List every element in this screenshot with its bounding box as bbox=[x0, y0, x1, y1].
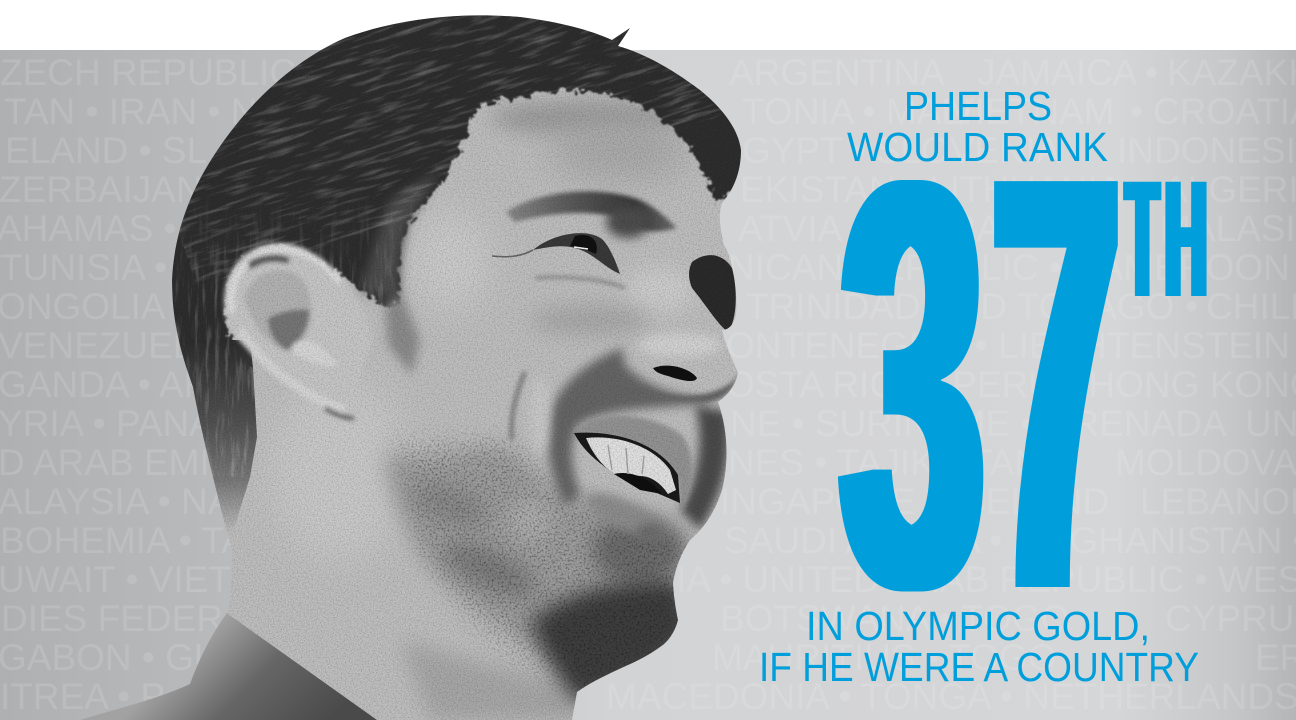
ear inner bbox=[244, 270, 312, 352]
watermark: olympic country names: MOLDOVA bbox=[1115, 442, 1296, 483]
superscript th bbox=[1126, 146, 1207, 332]
watermark: olympic country names: JAMAICA bbox=[977, 52, 1138, 93]
face tonal shading bbox=[490, 102, 690, 134]
superscript th: H bbox=[1165, 147, 1207, 332]
watermark: olympic country names: VENEZUEL bbox=[0, 325, 193, 366]
nasolabial shadow bbox=[547, 348, 715, 505]
watermark: olympic country names: EKISTAN • LITHUANIA bbox=[740, 169, 1123, 210]
watermark: olympic country names: MAURITIUS • TOGO bbox=[712, 637, 1057, 678]
nose bbox=[638, 333, 722, 357]
ear bbox=[224, 243, 372, 418]
watermark: olympic country names: ALAYSIA • NA bbox=[0, 481, 233, 522]
lower lip shadow bbox=[585, 489, 663, 540]
watermark: olympic country names: ARGENTINA bbox=[729, 52, 945, 93]
hair fade at nape bbox=[178, 340, 257, 528]
superscript th: T bbox=[1126, 146, 1158, 332]
watermark: olympic country names: ATVIA • BAHRAIN bbox=[738, 208, 1038, 249]
watermark: olympic country names: UWAIT • VIET bbox=[0, 559, 231, 600]
watermark: olympic country names: GYPT • SLOVENIA bbox=[742, 130, 1061, 171]
upper lip bbox=[575, 415, 692, 512]
heading: Phelps would rank bbox=[847, 83, 1108, 170]
watermark: olympic country names: TUNISIA • bbox=[0, 247, 167, 288]
watermark: olympic country names: INGAPORE • ICELAND bbox=[720, 481, 1109, 522]
watermark: olympic country names: ZERBAIJAN bbox=[0, 169, 203, 210]
watermark: olympic country names: GABON • GU bbox=[0, 637, 221, 678]
watermark: olympic country names: MACEDONIA • TONGA • NETHERLANDS bbox=[606, 676, 1296, 717]
heading: Phelps would rank: PHELPS bbox=[904, 83, 1052, 129]
watermark: olympic country names: TAN • IRAN • N bbox=[4, 91, 257, 132]
hair bbox=[172, 15, 741, 368]
watermark: olympic country names: NES • TAJIKISTAN bbox=[728, 442, 1041, 483]
eye bbox=[533, 233, 620, 274]
mouth interior bbox=[574, 433, 680, 503]
watermark: olympic country names: AHAMAS • bbox=[0, 208, 176, 249]
head and neck bbox=[172, 15, 741, 720]
sideburn bbox=[385, 295, 420, 375]
jacket collar bbox=[80, 613, 377, 720]
chin shadow bbox=[592, 516, 688, 584]
hair highlights bbox=[172, 16, 721, 477]
watermark: olympic country names: TONIA • MALI bbox=[742, 91, 972, 132]
eyebrow bbox=[506, 191, 677, 231]
watermark: olympic country names: GANDA • AR bbox=[0, 364, 210, 405]
skin grain bbox=[160, 0, 760, 720]
watermark: olympic country names: NICAN REPUBLIC • CAMEROON • bbox=[728, 247, 1296, 288]
watermark: olympic country names: ITREA • P bbox=[0, 676, 165, 717]
big number: 37th bbox=[841, 53, 1207, 712]
portrait: Michael Phelps bbox=[80, 15, 741, 720]
watermark: olympic country names: BOHEMIA • TA bbox=[0, 520, 246, 561]
hair fade at temple bbox=[360, 170, 440, 300]
watermark: olympic country names: SAUDI ARABIA • bbox=[724, 520, 1002, 561]
numeral 7: 7 bbox=[997, 53, 1115, 712]
eye socket shadow on far side bbox=[689, 255, 736, 332]
watermark: olympic country names: ONGOLIA bbox=[0, 286, 166, 327]
nostril bbox=[653, 366, 697, 381]
watermark: olympic country names: BOTSWANA • TOGO bbox=[720, 598, 1069, 639]
watermark: olympic country names: • bbox=[1130, 91, 1143, 132]
watermark: olympic country names: ONTENEGRO • LIECHTENSTEIN • bbox=[726, 325, 1296, 366]
watermark: olympic country names: DIES FEDERA bbox=[1, 598, 248, 639]
teeth bbox=[586, 437, 676, 494]
watermark: olympic country names: TRINIDAD AND TOBAGO bbox=[746, 286, 1174, 327]
stubble texture bbox=[386, 426, 694, 694]
far cheek edge bbox=[680, 405, 729, 530]
watermark: olympic country names: ELAND • SL bbox=[5, 130, 207, 171]
beard stubble bbox=[378, 442, 628, 653]
watermark: olympic country names: ZECH REPUBLIC bbox=[0, 52, 296, 93]
watermark: olympic country names: • bbox=[1185, 286, 1198, 327]
watermark: olympic country names: YRIA • PANA bbox=[0, 403, 214, 444]
subheading: in olympic gold, if he were a country bbox=[759, 603, 1199, 690]
subheading: in olympic gold, if he were a country: IF HE WERE A COUNTRY bbox=[759, 644, 1199, 690]
watermark: olympic country names: D ARAB EMI bbox=[0, 442, 210, 483]
watermark: olympic country names: VIETNAM bbox=[950, 91, 1114, 132]
watermark: olympic country names: NE • SURINAME • GRENADA bbox=[730, 403, 1227, 444]
numeral 3: 3 bbox=[841, 61, 984, 709]
watermark: olympic country names: • bbox=[1145, 52, 1158, 93]
ear helix bbox=[231, 249, 340, 312]
subheading: in olympic gold, if he were a country: IN OLYMPIC GOLD, bbox=[806, 603, 1150, 649]
heading: Phelps would rank: WOULD RANK bbox=[847, 124, 1108, 170]
